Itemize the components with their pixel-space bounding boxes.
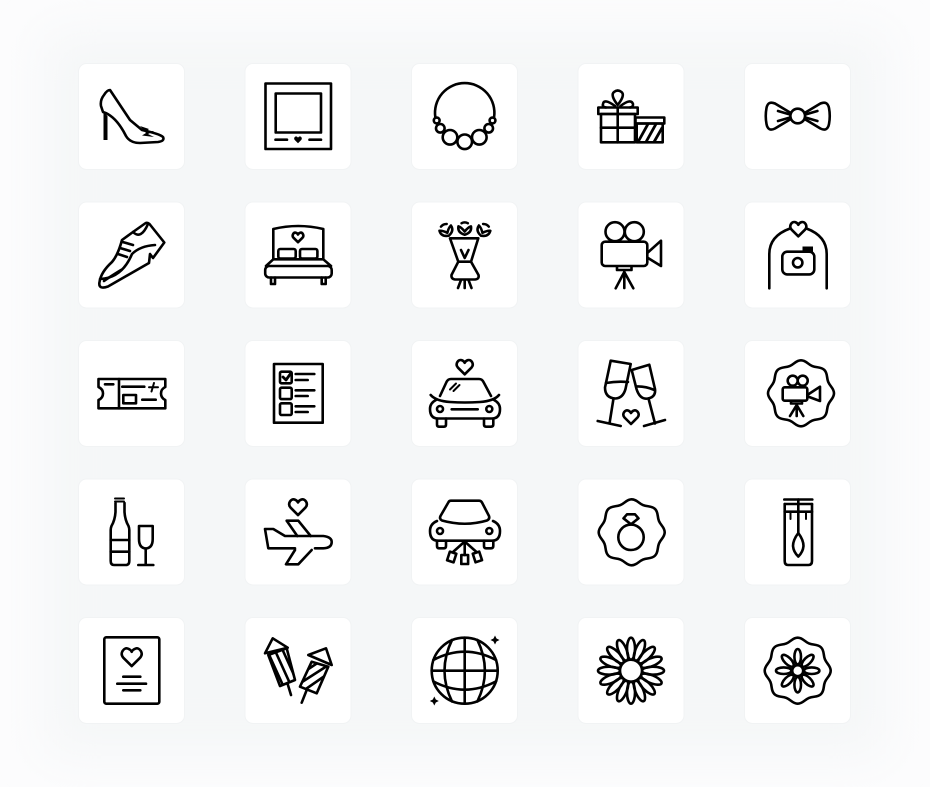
card: wedding invitation <box>78 618 184 724</box>
card: champagne toast <box>578 340 684 446</box>
icon: wedding car with heart <box>430 360 500 427</box>
icon: bow tie <box>766 103 830 130</box>
icon: ring badge <box>599 499 665 565</box>
icon: men's dress shoe <box>99 223 164 288</box>
card: pearl necklace <box>412 64 518 170</box>
icon: movie camera <box>602 222 661 288</box>
card: men's dress shoe <box>78 202 184 308</box>
icon: plane ticket <box>98 379 165 408</box>
icon: honeymoon airplane <box>265 499 332 564</box>
icon: camera badge <box>768 360 834 426</box>
icon: flower bouquet <box>438 222 492 288</box>
card: just married car with cans <box>412 479 518 585</box>
card: plane ticket <box>78 340 184 446</box>
icon: champagne toast <box>598 361 665 426</box>
icon: fireworks rockets <box>265 638 332 703</box>
card: high heel shoe <box>78 64 184 170</box>
card: double bed <box>245 202 351 308</box>
icon: photo frame <box>266 84 331 149</box>
icon: just married car with cans <box>430 501 500 564</box>
icon: pearl necklace <box>434 83 495 149</box>
card: disco ball <box>412 618 518 724</box>
icon: photo booth arch <box>769 222 827 288</box>
card: camera badge <box>744 340 850 446</box>
card: wine bottle and glass <box>78 479 184 585</box>
card: checklist <box>245 340 351 446</box>
icon: gift boxes <box>598 90 664 142</box>
icon: disco ball <box>430 636 500 706</box>
icon: checklist <box>274 364 323 423</box>
card: wedding car with heart <box>412 340 518 446</box>
card: honeymoon airplane <box>245 479 351 585</box>
icon: wedding invitation <box>104 637 159 704</box>
icon: flower badge <box>765 638 831 704</box>
card: movie camera <box>578 202 684 308</box>
icon: wine bottle and glass <box>111 498 153 565</box>
icon: double bed <box>265 226 332 284</box>
card: garment bag <box>744 479 850 585</box>
icon: daisy flower <box>598 638 664 704</box>
card: daisy flower <box>578 618 684 724</box>
card: fireworks rockets <box>245 618 351 724</box>
card: photo booth arch <box>744 202 850 308</box>
card: bow tie <box>744 64 850 170</box>
card: flower bouquet <box>412 202 518 308</box>
icon: garment bag <box>784 500 812 565</box>
card: gift boxes <box>578 64 684 170</box>
card: ring badge <box>578 479 684 585</box>
card: photo frame <box>245 64 351 170</box>
card: flower badge <box>744 618 850 724</box>
icon: high heel shoe <box>101 90 163 143</box>
